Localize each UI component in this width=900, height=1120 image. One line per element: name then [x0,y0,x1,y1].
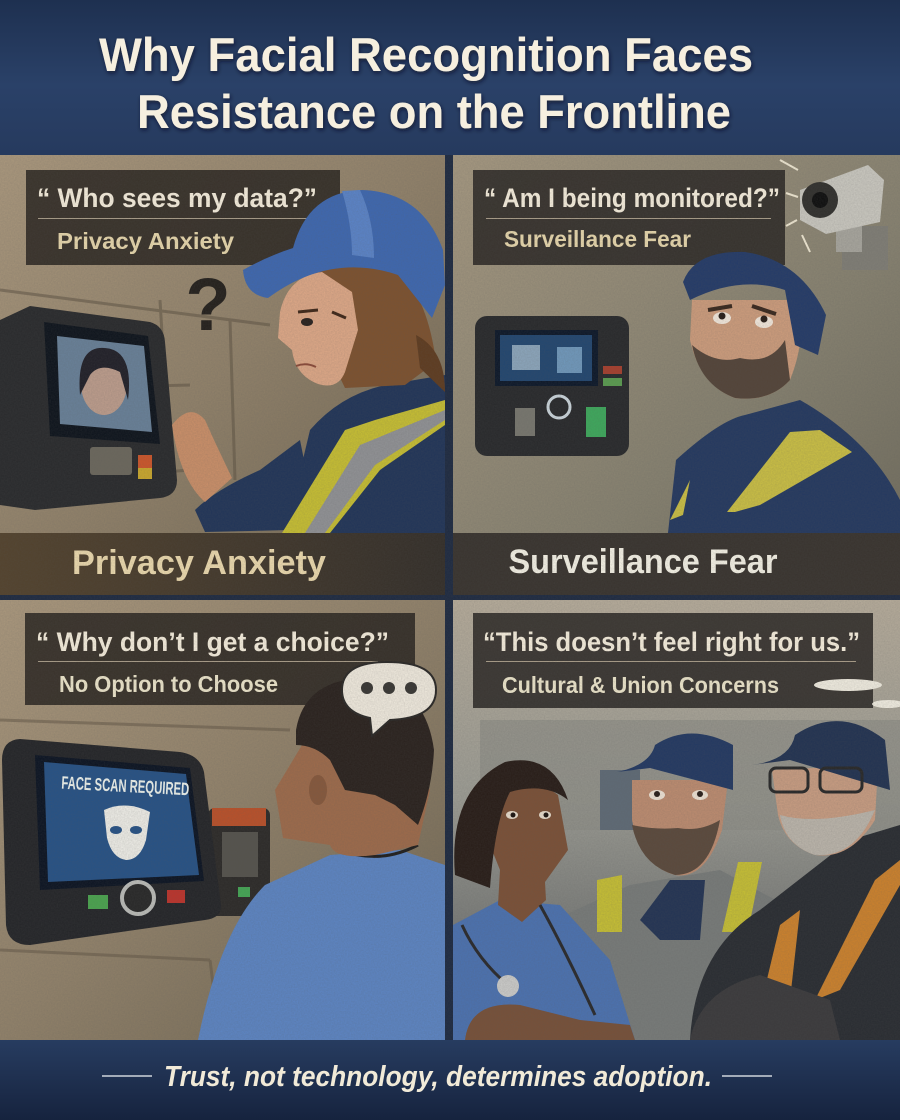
worker in cap [565,734,785,1040]
gutter [0,155,900,1040]
wall [453,155,900,595]
title [99,28,753,138]
title: Resistance on the Frontline [137,85,731,138]
title: Why Facial Recognition Faces [99,28,753,81]
worker in hard hat [172,190,445,535]
icon: speech bubble [342,662,436,736]
icon: face scan kiosk: FACE SCAN REQUIRED [61,773,190,799]
panel: privacy anxiety [0,155,445,595]
speech caption: Surveillance Fear [504,226,691,252]
background hallway [453,600,900,1040]
panel: privacy anxiety: Privacy Anxiety [72,544,326,582]
worker from behind [198,678,445,1040]
speech caption: “ Who sees my data?” [37,183,317,213]
worker looking up [668,252,900,533]
panel: surveillance fear: Surveillance Fear [508,543,778,581]
icon: kiosk with face scan [0,306,177,510]
icon: face scan kiosk [2,739,221,945]
older worker [690,721,900,1040]
bottom label band [453,533,900,595]
header background [0,0,900,155]
speech caption: “ Why don’t I get a choice?” [36,627,389,657]
wall [0,155,445,595]
footer band [0,1040,900,1120]
wall [0,600,445,1040]
speech caption [473,613,873,708]
speech caption: “This doesn’t feel right for us.” [483,627,860,657]
speech caption: Cultural & Union Concerns [502,672,779,698]
panel: no option to choose [0,600,445,1040]
bottom label band [0,533,445,595]
icon: wall terminal [475,316,629,456]
panel: surveillance fear [453,155,900,595]
nurse [453,760,635,1040]
speech caption [473,170,785,265]
panel: cultural and union concerns [453,600,900,1040]
footer tagline: Trust, not technology, determines adoption. [164,1061,712,1093]
speech caption: No Option to Choose [59,671,278,697]
speech caption: Privacy Anxiety [57,228,234,254]
speech caption [25,613,415,705]
icon: security camera [780,160,888,270]
ceiling lights [814,679,900,708]
speech caption: “ Am I being monitored?” [484,183,780,213]
icon: question mark: ? [185,263,231,346]
icon: keypad [208,808,270,916]
speech caption [26,170,340,265]
